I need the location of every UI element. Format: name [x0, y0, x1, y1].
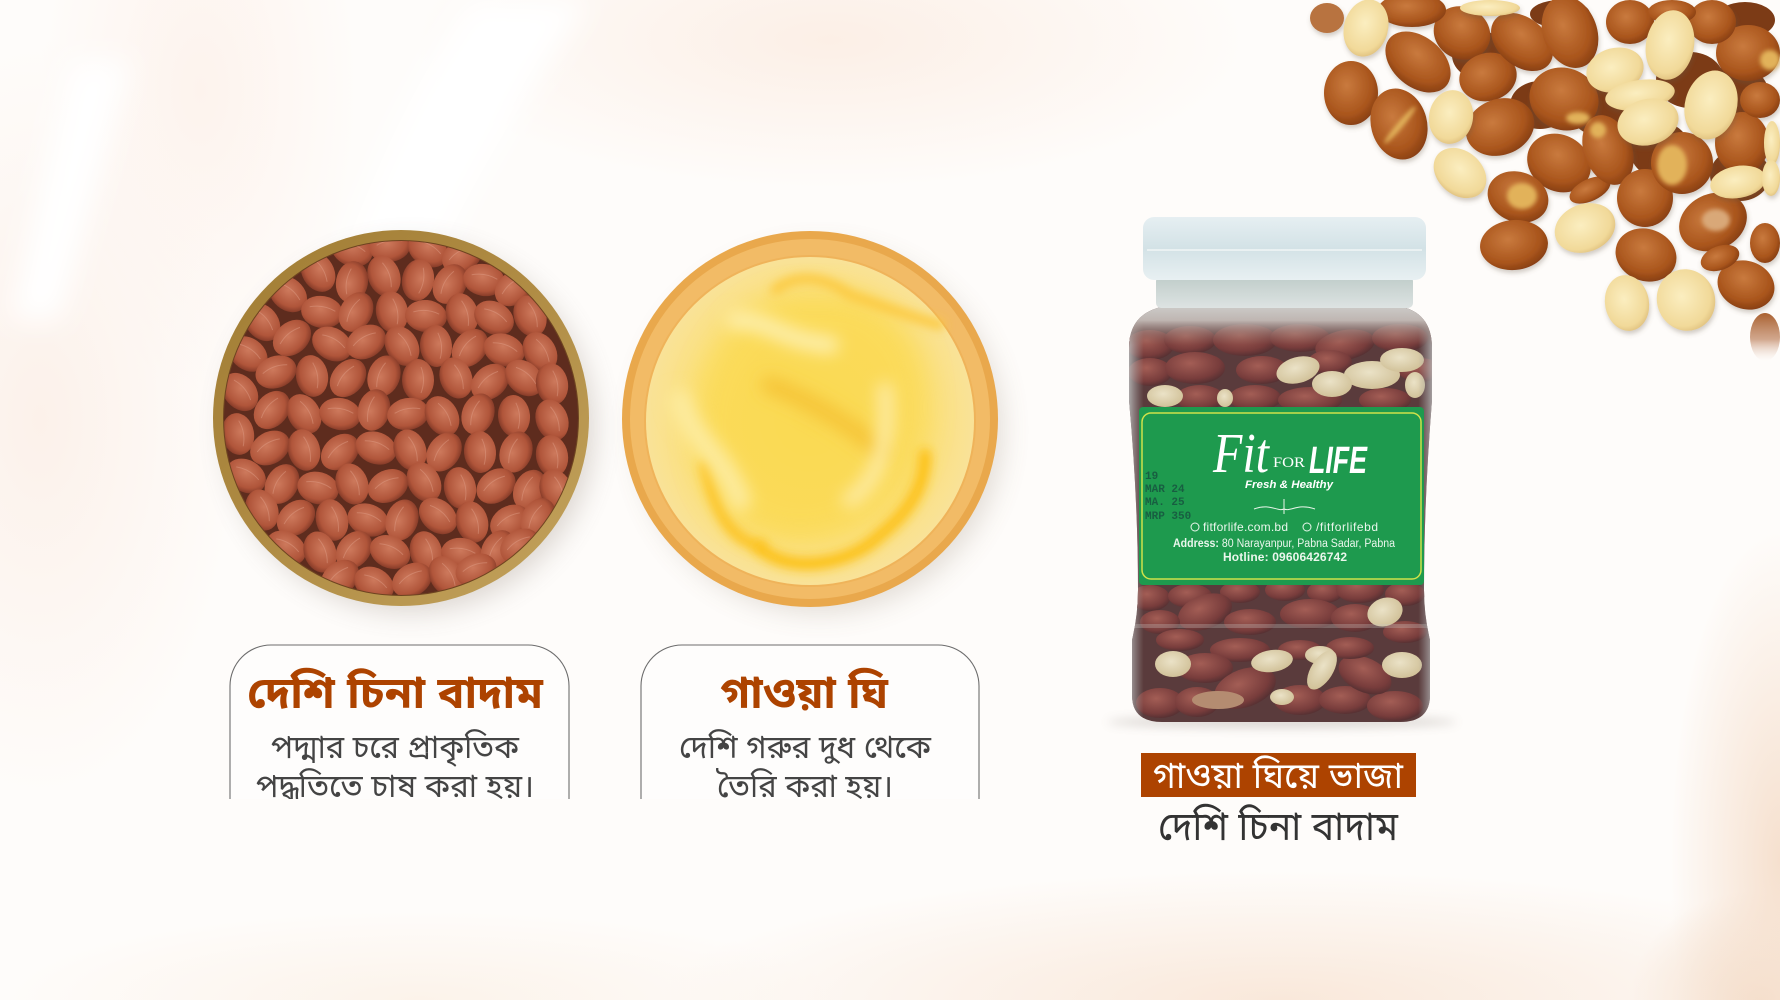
- bowl of raw peanuts: [213, 226, 594, 612]
- product jar: [1107, 217, 1457, 728]
- card description: পদ্মার চরে প্রাকৃতিক: [271, 729, 520, 767]
- jar neck: [1156, 276, 1413, 308]
- batch stamp: 19: [1145, 471, 1158, 483]
- batch stamp: [1145, 471, 1191, 523]
- bowl of ghee: [622, 231, 1002, 612]
- brand logo: LIFE: [1309, 440, 1368, 482]
- card description: [679, 729, 932, 804]
- batch stamp: MAR 24: [1145, 484, 1185, 496]
- reddish roasted kernels: [1310, 0, 1780, 317]
- ghee swirl: [680, 279, 940, 564]
- peanuts in bowl: [224, 241, 578, 595]
- brand logo: Fresh & Healthy: [1245, 479, 1334, 491]
- batch stamp: MRP 350: [1145, 511, 1191, 523]
- card heading: দেশি চিনা বাদাম: [247, 667, 544, 718]
- jar glass and contents: [1125, 300, 1442, 725]
- jar ground shadow: [1107, 716, 1457, 728]
- jar lid: [1143, 217, 1426, 280]
- silk highlights: [10, 0, 590, 520]
- jar kernels: [1126, 324, 1442, 721]
- card description: [256, 729, 534, 804]
- card heading: গাওয়া ঘি: [720, 667, 888, 718]
- yellow skin-break patches: [1382, 50, 1780, 231]
- wooden bowl: [213, 230, 589, 606]
- bowl shadow: [226, 244, 594, 612]
- card description: পদ্ধতিতে চাষ করা হয়।: [256, 768, 534, 804]
- ornament: [1254, 499, 1315, 514]
- green label: [1139, 407, 1424, 585]
- caption badge: গাওয়া ঘিয়ে ভাজা: [1153, 754, 1403, 796]
- brand logo: [1212, 423, 1368, 491]
- card: cow ghee: [641, 645, 979, 804]
- card: deshi peanut: [230, 645, 569, 804]
- glass sheen: [1125, 300, 1437, 725]
- brand logo: FOR: [1273, 455, 1305, 471]
- card description: তৈরি করা হয়।: [715, 768, 893, 804]
- back layer kernels: [1452, 0, 1775, 201]
- contact details: /fitforlifebd: [1316, 520, 1378, 534]
- card outline: [641, 645, 979, 799]
- contact details: Hotline: 09606426742: [1223, 550, 1347, 564]
- contact details: Address: 80 Narayanpur, Pabna Sadar, Pabna: [1173, 538, 1396, 550]
- contact details: [1173, 520, 1396, 564]
- card outline: [230, 645, 569, 799]
- contact details: fitforlife.com.bd: [1203, 520, 1288, 534]
- fading kernel at the edge: [1750, 313, 1780, 361]
- caption product name: দেশি চিনা বাদাম: [1158, 803, 1398, 849]
- brand logo: Fit: [1212, 423, 1270, 485]
- scattered roasted peanuts, top right: [1310, 0, 1780, 361]
- pale split kernels: [1337, 0, 1780, 339]
- batch stamp: MA. 25: [1145, 497, 1185, 509]
- card description: দেশি গরুর দুধ থেকে: [679, 729, 932, 765]
- ghee bowl shadow: [638, 248, 1002, 612]
- clay bowl: [622, 231, 998, 607]
